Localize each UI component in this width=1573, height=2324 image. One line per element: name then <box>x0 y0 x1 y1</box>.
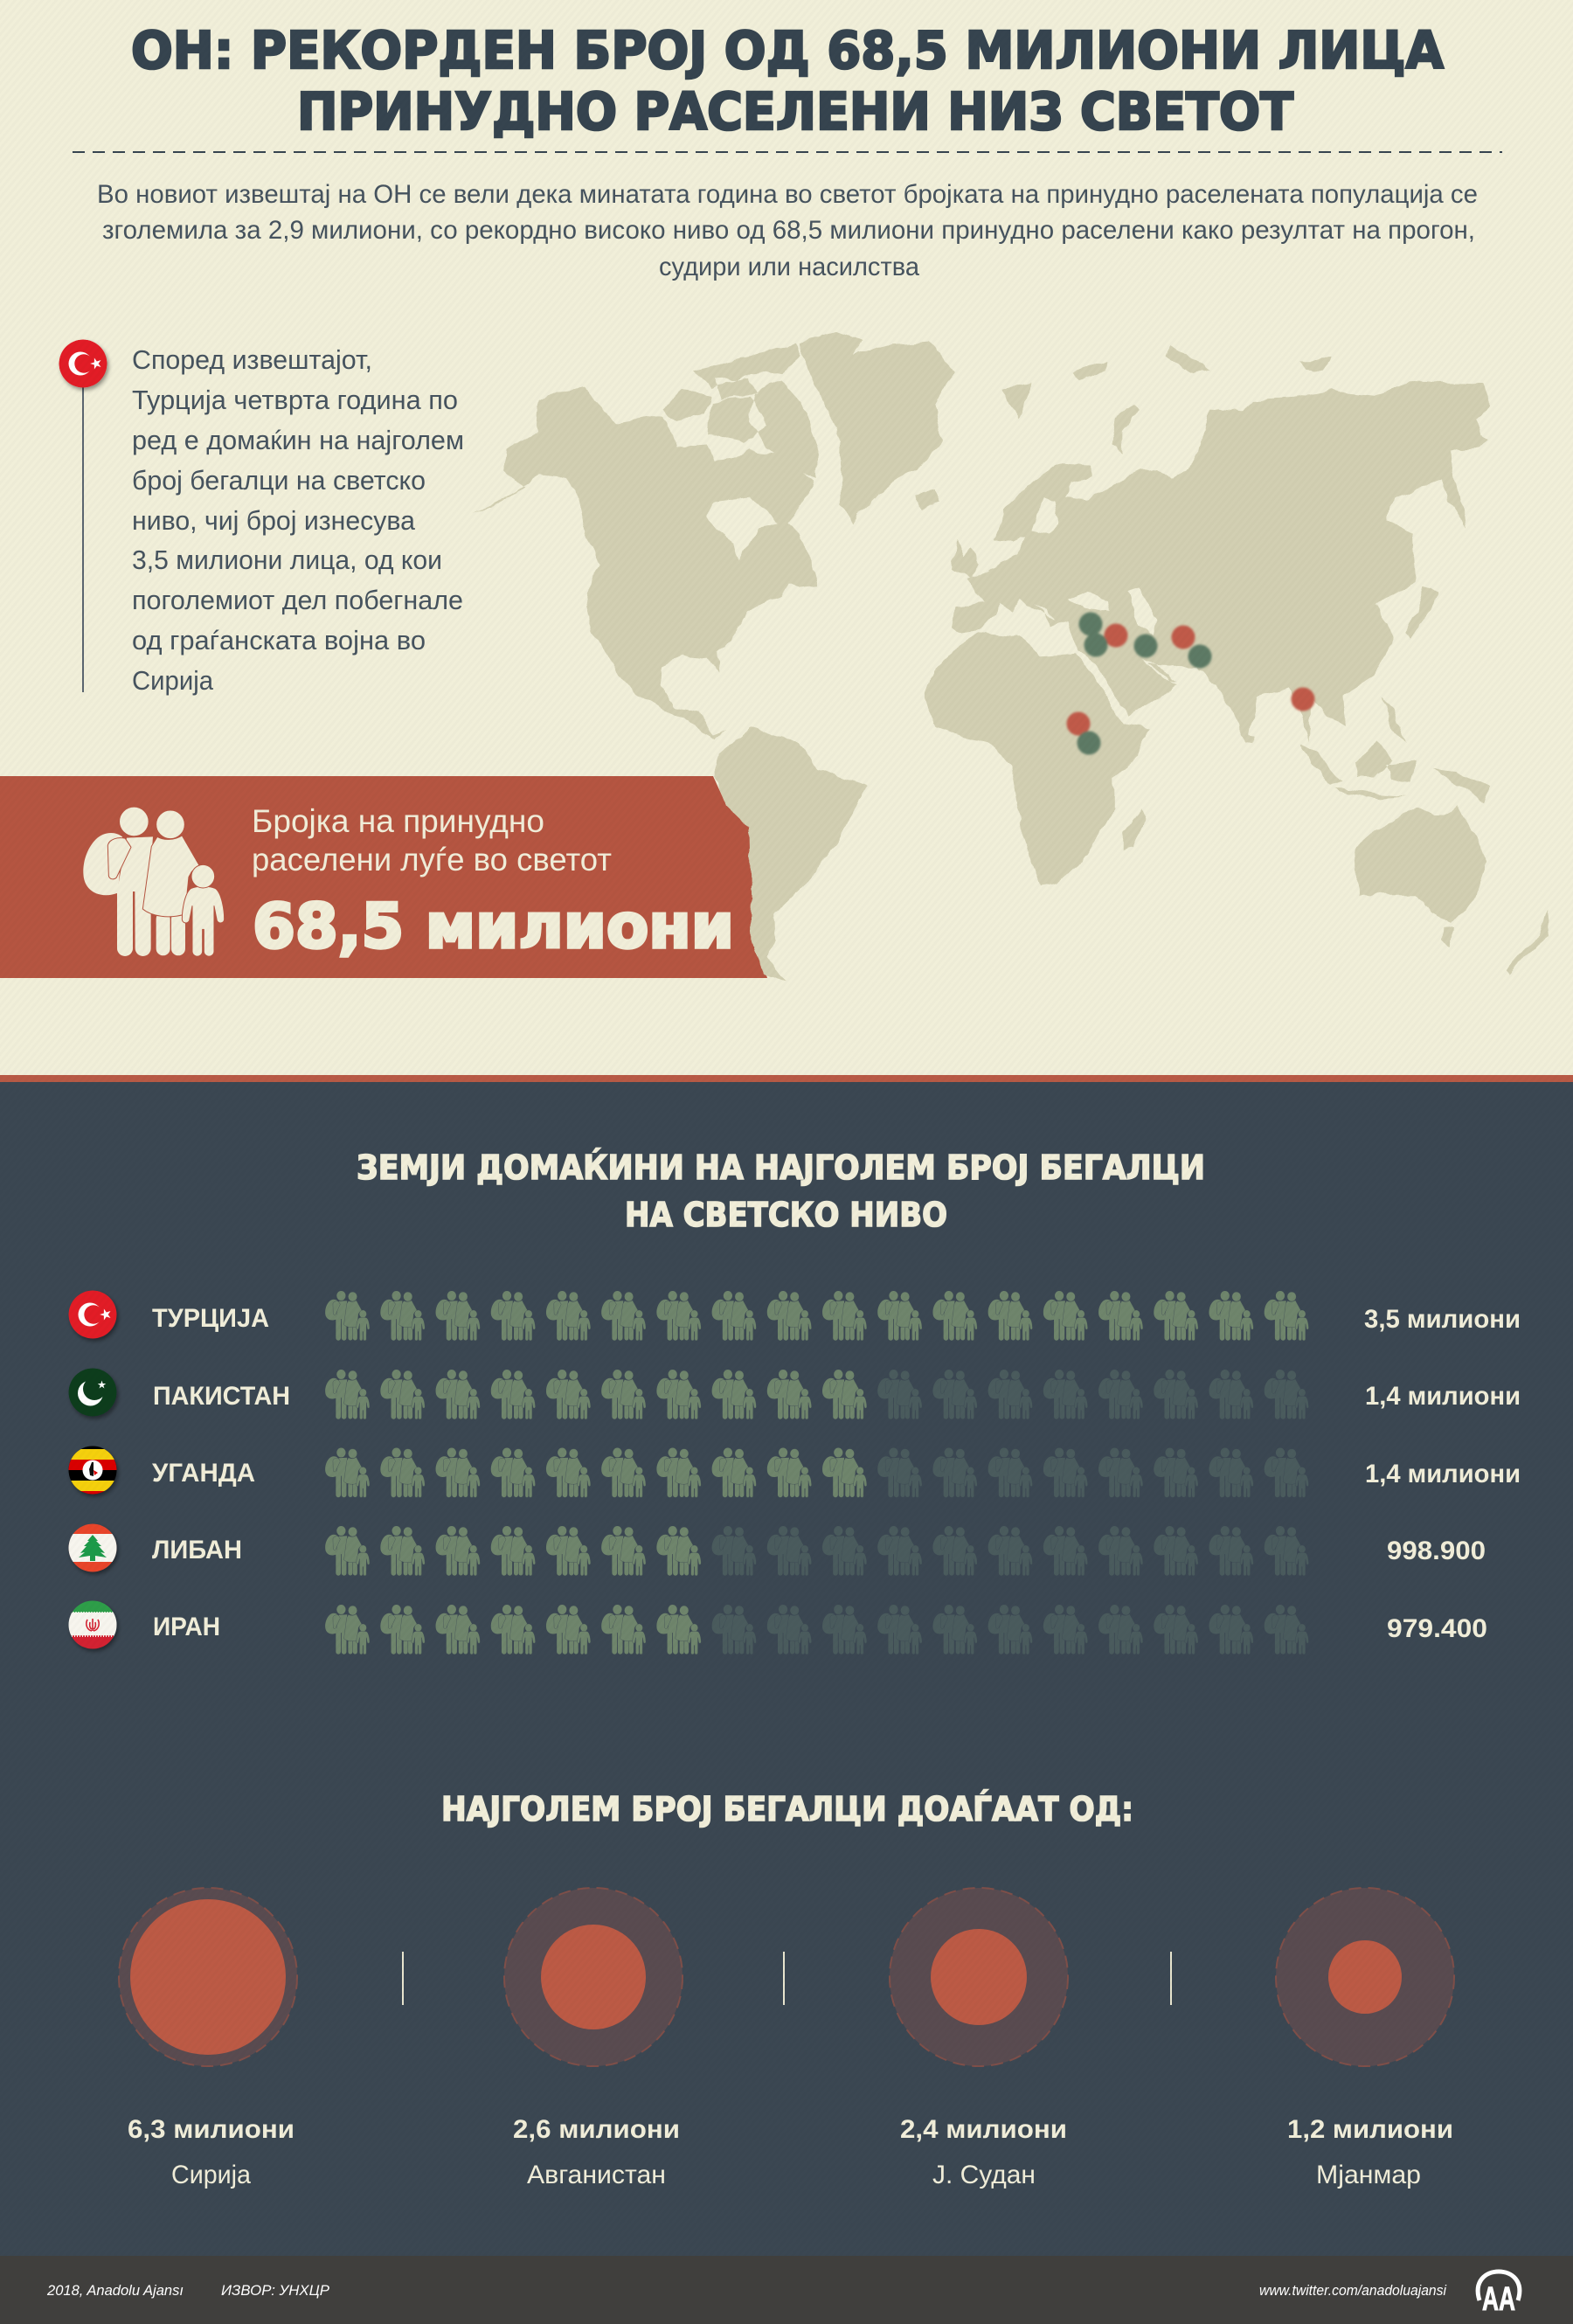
icon: AA logo: AA <box>1482 2281 1515 2318</box>
world map <box>472 332 1550 982</box>
flag: Turkey <box>68 1290 117 1339</box>
pictogram row <box>325 1291 1309 1341</box>
paper background <box>0 0 1573 1077</box>
origin: Syria: Сирија <box>171 2161 251 2189</box>
intro paragraph: судири или насилства <box>659 253 919 281</box>
callout: Turkey text with pin <box>59 339 464 696</box>
row: Iran <box>68 1600 1487 1655</box>
value: 998.900 <box>1387 1537 1486 1565</box>
callout text: број бегалци на светско <box>132 465 426 496</box>
origin: South Sudan: Ј. Судан <box>932 2161 1036 2189</box>
panel: dark section <box>0 1082 1573 2256</box>
country name: ЛИБАН <box>152 1536 242 1564</box>
flag: Iran <box>68 1600 117 1649</box>
heading: host countries: ЗЕМЈИ ДОМАЌИНИ НА НАЈГОЛЕМ БРОЈ БЕГАЛЦИ <box>357 1148 1205 1187</box>
origin: Myanmar: Мјанмар <box>1316 2161 1421 2189</box>
row: Lebanon <box>68 1524 1486 1576</box>
map: Australia <box>1355 805 1486 923</box>
value: 1,4 милиони <box>1365 1460 1521 1488</box>
origin: South Sudan <box>890 1888 1068 2189</box>
flag: Lebanon <box>68 1524 117 1571</box>
map: North America <box>472 388 817 739</box>
heading: host countries: НА СВЕТСКО НИВО <box>625 1196 947 1234</box>
flag: Uganda <box>68 1446 117 1496</box>
country name: ПАКИСТАН <box>153 1382 290 1411</box>
banner text: Бројка на принудно <box>252 803 544 839</box>
row: Turkey <box>68 1290 1521 1341</box>
pictogram row <box>325 1605 1309 1655</box>
row: Uganda <box>68 1446 1521 1497</box>
footer: 2018, Anadolu Ajansı <box>46 2282 184 2299</box>
origin: Syria: 6,3 милиони <box>128 2115 295 2144</box>
callout text: од граѓанската војна во <box>132 625 426 656</box>
value: 979.400 <box>1387 1614 1487 1643</box>
intro paragraph: зголемила за 2,9 милиони, со рекордно високо ниво од 68,5 милиони принудно раселени како резултат на прогон, <box>102 216 1475 245</box>
origin: Myanmar: 1,2 милиони <box>1287 2115 1453 2144</box>
callout text <box>132 344 464 696</box>
map markers <box>1066 612 1314 755</box>
callout text: Според извештајот, <box>132 344 372 375</box>
map: smaller islands <box>914 346 1550 975</box>
footer: www.twitter.com/anadoluajansi <box>1259 2282 1447 2299</box>
icon: refugee family <box>83 808 225 956</box>
title: ОН: РЕКОРДЕН БРОЈ ОД 68,5 МИЛИОНИ ЛИЦА <box>131 20 1444 80</box>
origin: Syria <box>119 1888 297 2189</box>
value: 3,5 милиони <box>1364 1305 1521 1334</box>
panel: red banner <box>0 776 767 978</box>
origin: Afghanistan <box>504 1888 683 2189</box>
pictogram row <box>325 1448 1309 1497</box>
pictogram row <box>325 1526 1309 1576</box>
heading: origin countries: НАЈГОЛЕМ БРОЈ БЕГАЛЦИ ДОАЃААТ ОД: <box>441 1790 1133 1828</box>
origin: South Sudan: 2,4 милиони <box>900 2115 1067 2144</box>
callout text: Турција четврта година по <box>132 385 458 415</box>
callout text: ред е домаќин на најголем <box>132 425 464 455</box>
map: Madagascar <box>1124 808 1146 850</box>
callout text: ниво, чиј број изнесува <box>132 505 416 536</box>
row: Pakistan <box>68 1369 1521 1419</box>
banner text: раселени луѓе во светот <box>252 842 612 878</box>
flag: Pakistan <box>68 1369 117 1416</box>
map: Greenland <box>799 332 955 524</box>
title <box>131 20 1444 142</box>
map: Africa <box>925 632 1149 886</box>
bubble <box>1276 1888 1454 2066</box>
intro paragraph: Во новиот извештај на ОН се вели дека минатата година во светот бројката на принудно раселената популација се <box>97 180 1478 209</box>
callout text: 3,5 милиони лица, од кои <box>132 545 442 575</box>
bubble <box>504 1888 683 2066</box>
heading: host countries <box>357 1148 1205 1234</box>
country name: УГАНДА <box>152 1459 255 1488</box>
country name: ИРАН <box>153 1613 220 1641</box>
origin: Afghanistan: Авганистан <box>527 2161 666 2189</box>
map: Arctic islands <box>663 343 817 479</box>
bubble <box>119 1888 297 2066</box>
icon: AA logo <box>1478 2272 1520 2318</box>
banner text <box>252 803 734 962</box>
bubble <box>890 1888 1068 2066</box>
country name: ТУРЦИЈА <box>152 1304 269 1333</box>
origin: Afghanistan: 2,6 милиони <box>513 2115 680 2144</box>
icon: Turkish flag pin <box>59 339 107 388</box>
map: Eurasia <box>952 382 1492 743</box>
callout text: поголемиот дел побегнале <box>132 585 463 615</box>
pictogram row <box>325 1370 1309 1419</box>
value: 1,4 милиони <box>1365 1382 1521 1411</box>
map: South America <box>714 727 865 982</box>
footer: ИЗВОР: УНХЦР <box>221 2282 330 2299</box>
footer <box>0 2256 1573 2324</box>
big number: 68,5 милиони <box>253 891 734 962</box>
title: ПРИНУДНО РАСЕЛЕНИ НИЗ СВЕТОТ <box>297 81 1293 142</box>
callout text: Сирија <box>132 665 214 696</box>
intro paragraph <box>97 180 1478 281</box>
origin: Myanmar <box>1276 1888 1454 2189</box>
